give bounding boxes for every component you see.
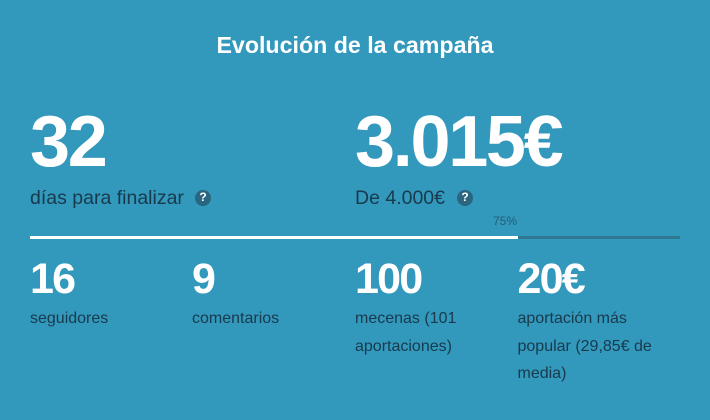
label: popular contribution: aportación más bbox=[518, 310, 627, 327]
label: followers: seguidores bbox=[30, 310, 108, 327]
label: popular contribution bbox=[518, 310, 652, 382]
label: patrons: mecenas (101 bbox=[355, 310, 456, 327]
stat: followers: 16 bbox=[30, 255, 74, 303]
percentage label: 75% bbox=[493, 214, 517, 228]
progress bar fill bbox=[30, 236, 518, 239]
label: patrons bbox=[355, 310, 456, 354]
progress bar bbox=[30, 236, 680, 239]
label: popular contribution: media) bbox=[518, 365, 566, 382]
stat: patrons: 100 bbox=[355, 255, 421, 303]
stat: amount raised: 3.015€ bbox=[355, 102, 561, 182]
label: patrons: aportaciones) bbox=[355, 338, 452, 354]
icon: help days bbox=[195, 190, 211, 206]
stat: comments: 9 bbox=[192, 255, 214, 303]
stat: days remaining: 32 bbox=[30, 102, 106, 182]
label: funding goal: De 4.000€ bbox=[355, 187, 445, 209]
icon: help goal: ? bbox=[461, 190, 469, 204]
stat: popular contribution: 20€ bbox=[518, 255, 584, 303]
label: comments: comentarios bbox=[192, 310, 279, 327]
title: Evolución de la campaña bbox=[216, 32, 494, 58]
label: days remaining: días para finalizar bbox=[30, 187, 184, 209]
icon: help goal bbox=[457, 190, 473, 206]
label: popular contribution: popular (29,85€ de bbox=[518, 338, 652, 354]
icon: help days: ? bbox=[199, 190, 207, 204]
